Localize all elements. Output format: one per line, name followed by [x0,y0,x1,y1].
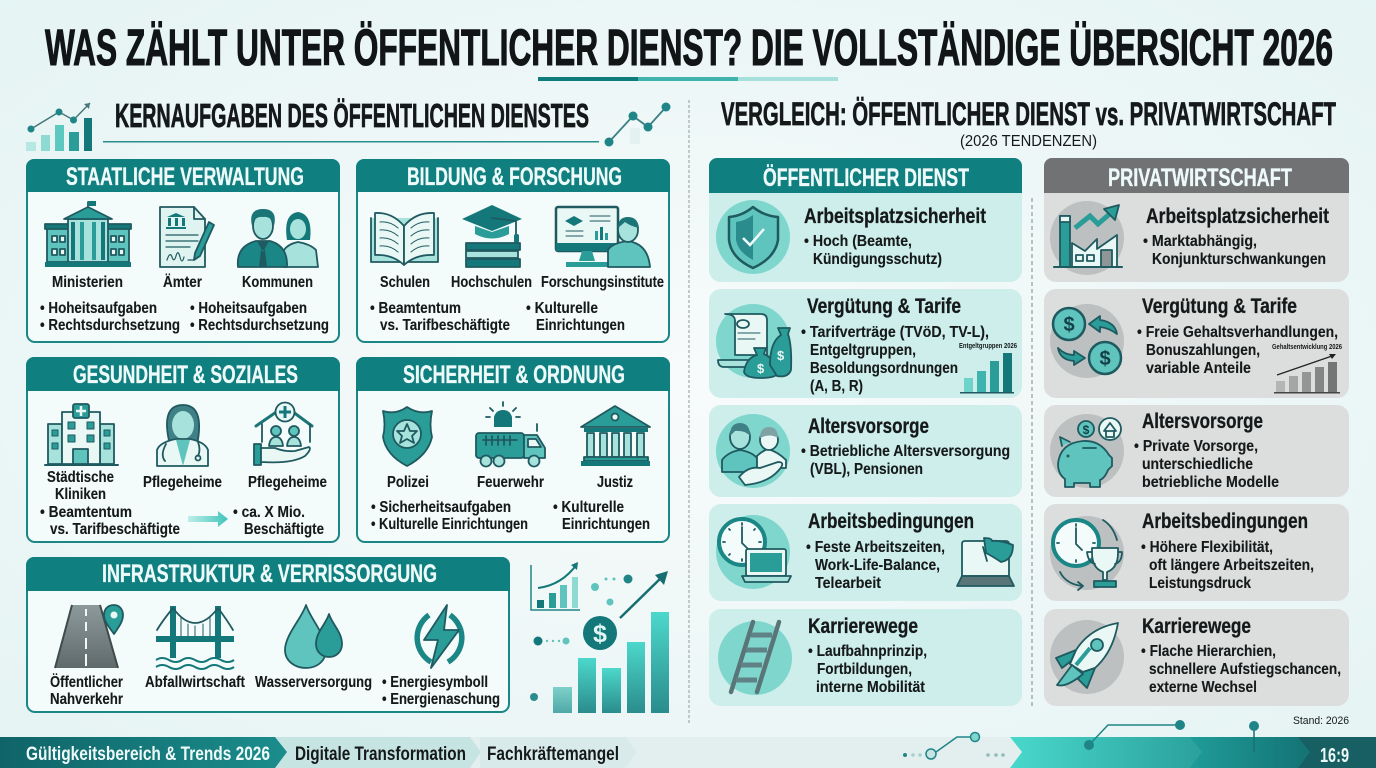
icon: care home [254,402,312,465]
bullet list [40,300,329,334]
row: Altersvorsorge: $ [1083,423,1090,437]
icon: energy [417,605,462,668]
column header: ÖFFENTLICHER DIENST [763,163,969,192]
icon: ministry building [45,201,131,267]
row: Vergütung und Tarife: $ [777,348,785,363]
row: Altersvorsorge: (VBL), Pensionen [810,461,923,478]
row: Altersvorsorge: unterschiedliche [1142,456,1253,473]
bullet list: vs. Tarifbeschäftigte [50,521,180,538]
column header [709,158,1022,193]
panel: Infrastruktur und Versorgung [26,557,510,712]
panel: Staatliche Verwaltung [26,159,340,342]
row: Arbeitsbedingungen [1044,504,1349,601]
footer text: Digitale Transformation [295,744,466,765]
row: Vergütung und Tarife: (A, B, R) [810,378,863,395]
bullet list: • Energiesymboll [382,674,488,691]
label: Pflegeheime [143,474,222,491]
row: Karrierewege [1044,609,1349,706]
label: Städtische [47,469,114,486]
row: Vergütung und Tarife: Besoldungsordnungen [810,360,958,377]
row: Karrierewege [709,609,1022,706]
row: Arbeitsbedingungen: Work-Life-Balance, [815,557,940,574]
icon: water drops [285,605,342,668]
arrow: rising [620,571,668,618]
icon: road [55,605,123,668]
row: Karrierewege: Karrierewege [808,615,918,638]
label [47,469,114,503]
row: Karrierewege: interne Mobilität [816,679,926,696]
row: Vergütung und Tarife [709,289,1022,398]
row: Arbeitsplatzsicherheit [1044,193,1349,282]
label: Kliniken [55,486,106,503]
row: Vergütung und Tarife: • Tarifverträge (TVöD, TV-L), [801,324,989,341]
bullet list: • Hoheitsaufgaben [190,300,307,317]
bullet list: • Rechtsdurchsetzung [190,317,329,334]
label: Hochschulen [451,274,532,291]
subheading: (2026 TENDENZEN) [960,133,1097,150]
row: Arbeitsbedingungen: Arbeitsbedingungen [1142,510,1308,533]
row: Altersvorsorge: betriebliche Modelle [1142,474,1279,491]
footer ratio label: 16:9 [1320,745,1349,767]
row: Arbeitsbedingungen: Telearbeit [815,575,882,592]
bullet list [40,504,180,538]
label: Nahverkehr [50,691,123,708]
footer arrows [1010,737,1376,768]
column divider [1031,198,1033,706]
bullet list: • Kulturelle [553,499,624,516]
row: Vergütung und Tarife: variable Anteile [1146,360,1251,377]
bullet list: • Sicherheitsaufgaben [371,499,511,516]
icon: police badge [383,407,432,466]
bullet list: Einrichtungen [536,317,625,334]
row: Vergütung und Tarife: Vergütung & Tarife [1142,295,1297,318]
icon: document [160,207,214,267]
row: Vergütung und Tarife [1044,289,1349,398]
bullet list [371,499,650,533]
row: Vergütung und Tarife: Vergütung & Tarife [807,295,961,318]
icon: heading chart right [604,102,670,146]
arrow [188,511,228,527]
bullet list: • Rechtsdurchsetzung [40,317,180,334]
bullet list: • Beamtentum [40,504,132,521]
icon: researcher at screen [556,207,650,267]
row: Altersvorsorge [709,405,1022,497]
row: Arbeitsbedingungen: • Höhere Flexibilität, [1141,539,1273,556]
panel: Bildung und Forschung [356,159,670,342]
row: Arbeitsbedingungen: Arbeitsbedingungen [808,510,974,533]
label: Ämter [163,273,202,291]
icon: bridge [156,606,234,669]
label: Forschungsinstitute [541,274,664,291]
label: Abfallwirtschaft [145,674,246,691]
label: Pflegeheime [248,474,327,491]
footer text: Gültigkeitsbereich & Trends 2026 [26,744,270,765]
bullet list: • Beamtentum [370,300,461,317]
heading: STAATLICHE VERWALTUNG [66,163,304,191]
panel: Gesundheit und Soziales [26,357,340,542]
icon: people [238,209,318,267]
bullet list: Einrichtungen [562,516,650,533]
row: Vergütung und Tarife: $ [757,361,765,376]
heading: SICHERHEIT & ORDNUNG [403,361,625,389]
icon: doctor [157,405,208,466]
column: Öffentlicher Dienst [709,158,1022,706]
row: Vergütung und Tarife: $ [1099,348,1111,370]
row: Arbeitsbedingungen: oft längere Arbeitszeiten, [1149,557,1314,574]
bullet list: • Energienaschung [382,691,500,708]
bullet list: • Hoheitsaufgaben [40,300,157,317]
row: Arbeitsplatzsicherheit: Kündigungsschutz) [813,251,942,268]
center divider [688,100,690,725]
label: Ministerien [52,274,123,291]
bullet list: • Kulturelle [526,300,598,317]
icon: dollar coin: $ [593,620,607,648]
row: Arbeitsplatzsicherheit [709,193,1022,282]
row: Karrierewege: • Flache Hierarchien, [1141,643,1276,660]
label [50,672,123,708]
note: Stand: Stand: 2026 [1293,715,1349,727]
row: Vergütung und Tarife: Entgeltgruppen 2026 [959,341,1017,350]
row: Altersvorsorge: • Betriebliche Altersversorgung [801,443,1010,460]
row: Altersvorsorge: Altersvorsorge [1142,410,1263,433]
label: Kommunen [242,274,313,291]
row: Vergütung und Tarife: • Freie Gehaltsverhandlungen, [1137,324,1338,341]
column header [1044,158,1349,193]
footer band [0,720,1376,768]
row: Arbeitsbedingungen: • Feste Arbeitszeiten, [806,539,945,556]
title underline [538,77,838,81]
heading rule [103,141,599,142]
callout: Beschäftigte [244,521,324,538]
footer text: Fachkräftemangel [487,744,619,765]
bullet list: vs. Tarifbeschäftigte [380,317,510,334]
bullet list: • Kulturelle Einrichtungen [371,516,528,533]
row: Karrierewege: • Laufbahnprinzip, [808,643,927,660]
callout: • ca. X Mio. [233,504,305,521]
bullet list [382,674,500,708]
column: Privatwirtschaft [1044,158,1349,706]
label: Wasserversorgung [255,674,372,691]
row: Karrierewege: externe Wechsel [1149,679,1257,696]
callout [233,504,324,538]
row: Vergütung und Tarife: Gehaltsentwicklung 2026 [1272,342,1342,351]
heading: Kernaufgaben: KERNAUFGABEN DES ÖFFENTLICHEN DIENSTES [115,97,589,134]
icon: fire truck [476,402,545,466]
row: Altersvorsorge: • Private Vorsorge, [1134,438,1258,455]
bullet list [370,300,625,334]
decorative dots [530,574,632,701]
label: Feuerwehr [477,474,544,491]
icon: graduation cap [462,205,522,267]
row: Karrierewege: Fortbildungen, [817,661,912,678]
icon: book [371,213,438,265]
panel: Sicherheit und Ordnung [356,357,670,542]
row: Vergütung und Tarife: Entgeltgruppen, [810,342,916,359]
footer network decoration [903,720,1259,759]
column header: PRIVATWIRTSCHAFT [1108,164,1292,192]
row: Arbeitsbedingungen [709,504,1022,601]
row: Altersvorsorge [1044,405,1349,497]
bar chart [553,612,669,713]
row: Karrierewege: schnellere Aufstiegschancen, [1149,661,1341,678]
row: Karrierewege: Karrierewege [1142,615,1251,638]
chart: small rising bars [531,562,580,610]
icon: heading chart left [26,103,92,151]
icon: dollar coin [583,616,617,650]
label: Schulen [380,274,430,291]
heading: GESUNDHEIT & SOZIALES [73,361,298,389]
row: Vergütung und Tarife: $ [1063,314,1075,336]
row: Arbeitsplatzsicherheit: Arbeitsplatzsicherheit [1146,205,1329,228]
row: Arbeitsplatzsicherheit: • Hoch (Beamte, [804,233,912,250]
label: Justiz [597,474,633,491]
row: Arbeitsplatzsicherheit: Konjunkturschwankungen [1152,251,1326,268]
heading: INFRASTRUKTUR & VERRISSORGUNG [102,560,437,588]
row: Vergütung und Tarife: Bonuszahlungen, [1146,342,1260,359]
row: Arbeitsbedingungen: Leistungsdruck [1149,575,1251,592]
icon: hospital [45,404,118,465]
label: Öffentlicher [50,672,123,691]
icon: courthouse [581,406,650,466]
row: Arbeitsplatzsicherheit: • Marktabhängig, [1143,233,1257,250]
label: Polizei [387,474,429,491]
row: Altersvorsorge: Altersvorsorge [808,415,929,438]
row: Arbeitsplatzsicherheit: Arbeitsplatzsicherheit [804,205,986,228]
heading: BILDUNG & FORSCHUNG [407,163,622,191]
